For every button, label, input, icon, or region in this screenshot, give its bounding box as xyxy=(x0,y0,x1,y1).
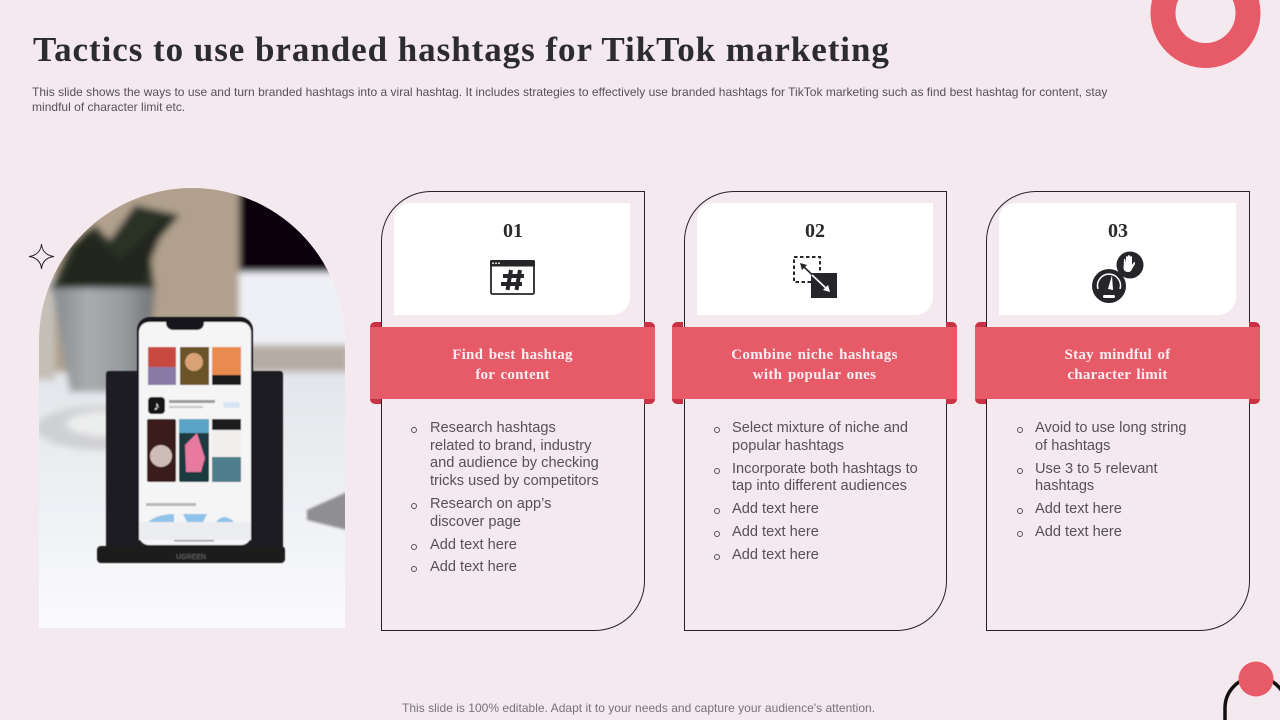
bullet list: related to brand, industry xyxy=(430,438,591,454)
footer note: This slide is 100% editable. Adapt it to your needs and capture your audience's attention. xyxy=(402,701,875,715)
subtitle text: This slide shows the ways to use and turn branded hashtags into a viral hashtag. It includes strategies to effectively use branded hashtags for TikTok marketing such as find best hashtag for content, stay xyxy=(32,85,1107,99)
ribbon: heading: for content xyxy=(475,367,550,383)
bullet list: Research on app’s xyxy=(430,496,551,512)
bullet list: and audience by checking xyxy=(430,455,599,471)
icon: resize dashed box with arrow xyxy=(793,256,837,298)
bullet list: Add text here xyxy=(1035,524,1122,540)
bullet list: of hashtags xyxy=(1035,438,1110,454)
bullet list: popular hashtags xyxy=(732,438,844,454)
ribbon: heading xyxy=(672,322,957,404)
icon: speedometer and stop hand xyxy=(1092,252,1144,303)
bullet list: Add text here xyxy=(430,559,517,575)
bullet list: Select mixture of niche and xyxy=(732,420,908,436)
bullet list xyxy=(411,420,599,575)
decorative ring top right xyxy=(1150,0,1260,68)
bullet list: Research hashtags xyxy=(430,420,556,436)
ribbon: heading xyxy=(975,322,1260,404)
bullet list: tricks used by competitors xyxy=(430,473,599,489)
number 02: 02 xyxy=(805,220,825,242)
panel: combine niche hashtags xyxy=(672,191,957,631)
icon: sparkle star xyxy=(28,244,54,269)
ribbon: heading: Stay mindful of xyxy=(1065,347,1170,363)
ribbon: heading: Combine niche hashtags xyxy=(731,347,898,363)
photo: phone showing TikTok on a stand in arched frame: UGREEN xyxy=(176,554,206,561)
subtitle text xyxy=(32,85,1108,114)
icon: browser window with hash xyxy=(490,260,535,295)
bullet list: discover page xyxy=(430,514,521,530)
photo: phone showing TikTok on a stand in arched frame: ♪ xyxy=(154,399,160,413)
bullet list: Incorporate both hashtags to xyxy=(732,461,918,477)
bullet list: Add text here xyxy=(1035,501,1122,517)
bullet list: Use 3 to 5 relevant xyxy=(1035,461,1158,477)
bullet list: Add text here xyxy=(732,501,819,517)
panel: stay mindful of character limit xyxy=(975,191,1260,631)
bullet list xyxy=(714,420,918,563)
bullet list: hashtags xyxy=(1035,478,1094,494)
number 01: 01 xyxy=(503,220,523,242)
bullet list: Add text here xyxy=(732,547,819,563)
bullet list: Add text here xyxy=(732,524,819,540)
number 03: 03 xyxy=(1108,220,1128,242)
ribbon: heading: character limit xyxy=(1067,367,1168,383)
bullet list: Avoid to use long string xyxy=(1035,420,1186,436)
decorative arch and dot bottom right xyxy=(1223,662,1280,720)
ribbon: heading: with popular ones xyxy=(753,367,876,383)
bullet list: Add text here xyxy=(430,537,517,553)
bullet list xyxy=(1017,420,1186,540)
title: Tactics to use branded hashtags for TikTok marketing xyxy=(33,30,890,69)
panel: find best hashtag xyxy=(370,191,655,631)
ribbon: heading xyxy=(370,322,655,404)
photo: phone showing TikTok on a stand in arched frame xyxy=(39,188,345,628)
subtitle text: mindful of character limit etc. xyxy=(32,100,185,114)
ribbon: heading: Find best hashtag xyxy=(452,347,573,363)
bullet list: tap into different audiences xyxy=(732,478,907,494)
